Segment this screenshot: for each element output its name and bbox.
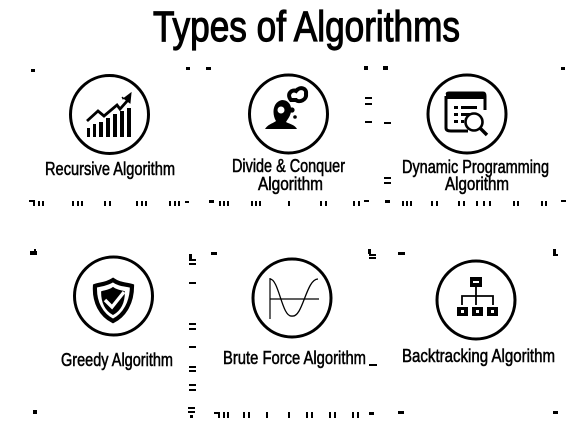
label: brute force algorithm: Brute Force Algorithm [223,348,366,368]
icon: window with magnifier [428,75,506,153]
label: divide and conquer algorithm [232,156,345,194]
label: divide and conquer algorithm: Divide & Conquer [232,156,345,176]
panel: brute force algorithm [223,259,366,368]
panel: dynamic programming algorithm [402,75,549,194]
panel: greedy algorithm [61,257,173,370]
icon: sine wave graph [253,259,331,337]
label: greedy algorithm: Greedy Algorithm [61,350,173,370]
label: divide and conquer algorithm: Algorithm [258,174,323,194]
title: Types of Algorithms [153,3,460,51]
panel: recursive algorithm [45,76,175,179]
panel: divide and conquer algorithm [232,75,345,194]
label: dynamic programming algorithm: Algorithm [445,174,509,194]
label: dynamic programming algorithm: Dynamic Programming [402,157,549,177]
panel: backtracking algorithm [402,261,555,366]
icon: hierarchy tree [437,261,515,339]
icon: head with thought bubble [250,75,328,153]
icon: shield with check [74,257,152,335]
icon: growth chart [70,76,148,154]
label: recursive algorithm: Recursive Algorithm [45,159,175,179]
label: dynamic programming algorithm [402,157,549,194]
label: backtracking algorithm: Backtracking Algorithm [402,346,555,366]
